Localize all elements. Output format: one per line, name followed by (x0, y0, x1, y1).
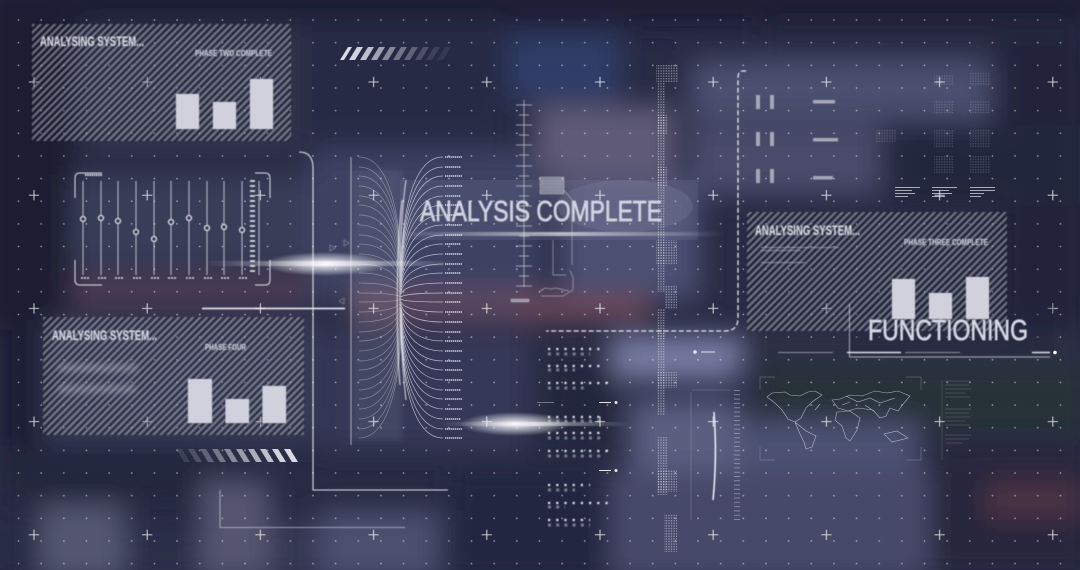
faint data lines (945, 381, 971, 443)
lens flare: lower (440, 412, 630, 436)
signal fan chart (352, 157, 462, 440)
caption: phase four: PHASE FOUR (205, 343, 246, 352)
vertical signal widget (691, 390, 737, 520)
heading: phase two panel: ANALYSING SYSTEM... (40, 33, 144, 49)
fan labels (445, 157, 462, 438)
dot columns: lower (657, 330, 677, 552)
ruler widget (511, 100, 573, 302)
panel: analysing system phase three (747, 212, 1007, 331)
dot matrix rows (548, 349, 610, 525)
connector lines (202, 152, 448, 528)
world map (760, 377, 921, 460)
headline light streak (395, 232, 725, 236)
data text blocks: right of map (941, 380, 943, 460)
flare streak: lower (440, 422, 630, 426)
dot columns: upper (656, 65, 678, 339)
tiny text lines (761, 247, 839, 263)
hatch bar: bottom (176, 449, 298, 462)
small readout lines (895, 187, 995, 197)
blurred detail lines (58, 364, 138, 393)
bar chart: phase two (176, 79, 273, 129)
caption: phase two: PHASE TWO COMPLETE (195, 49, 273, 58)
status box: functioning (778, 304, 1057, 357)
status box backdrop (849, 304, 1054, 354)
tick column (734, 390, 740, 520)
status dot (1053, 351, 1057, 354)
panel: analysing system phase four (43, 317, 304, 435)
status text: FUNCTIONING (868, 315, 1028, 347)
headline box: analysis complete (395, 180, 725, 240)
hatch bar: top (340, 47, 451, 60)
headline backdrop ellipse (557, 180, 693, 232)
flare streak: left (205, 261, 455, 266)
bar chart: phase three (892, 277, 989, 319)
small dash markers (537, 350, 715, 472)
heading: phase three panel: ANALYSING SYSTEM... (755, 222, 860, 238)
fan trunk (397, 180, 406, 400)
headline text: ANALYSIS COMPLETE (420, 196, 662, 228)
caption: phase three: PHASE THREE COMPLETE (904, 238, 989, 247)
status frame lines (778, 304, 1050, 357)
glow spine (713, 412, 715, 500)
faint dot blocks: top right (875, 72, 990, 173)
slider bank (75, 173, 270, 285)
lens flare: left (205, 252, 455, 276)
control readouts: top right (756, 95, 838, 183)
panel: analysing system phase two (32, 24, 291, 141)
bar chart: phase four (188, 379, 286, 423)
heading: phase four panel: ANALYSING SYSTEM... (52, 327, 157, 343)
dashed bracket line (546, 71, 746, 331)
